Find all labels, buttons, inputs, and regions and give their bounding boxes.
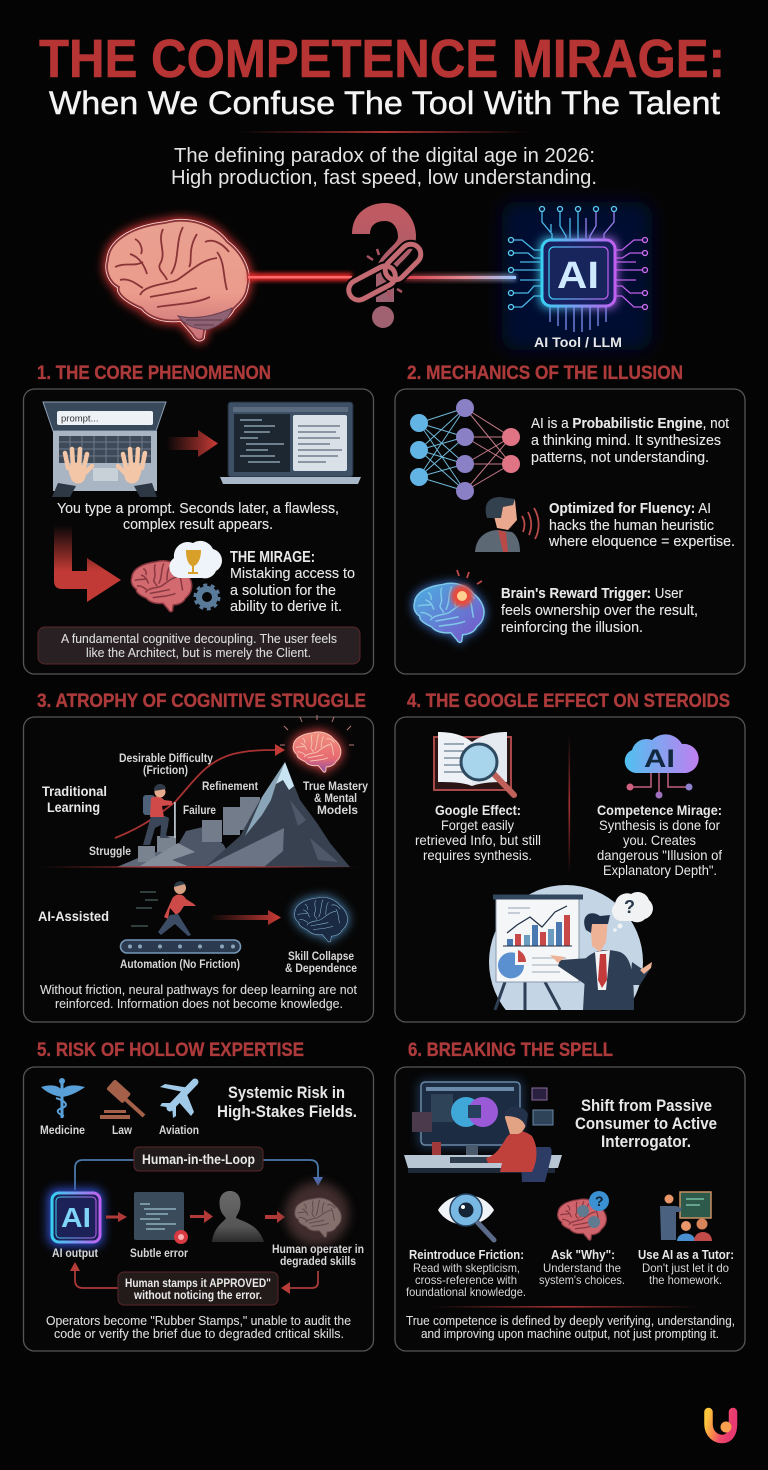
heading 3: 3. ATROPHY OF COGNITIVE STRUGGLE — [37, 691, 366, 712]
text: optimized for fluency: where eloquence = expertise. — [548, 533, 735, 550]
label: traditional learning: Learning — [47, 799, 100, 815]
hero: brain, broken link, AI chip — [107, 202, 652, 350]
callout: A fundamental cognitive decoupling. The user feels — [61, 631, 337, 646]
icon: brain with question bubble: ? — [595, 1193, 604, 1209]
labels: fields — [40, 1123, 199, 1137]
text: use AI as a tutor: Use AI as a Tutor: — [638, 1247, 734, 1262]
callout: human-in-the-loop — [134, 1147, 263, 1171]
text: the mirage: a solution for the — [230, 582, 336, 599]
heading 2: 2. MECHANICS OF THE ILLUSION — [407, 363, 683, 384]
panel: core phenomenon — [24, 389, 374, 674]
labels: climb stages: Struggle — [89, 844, 131, 858]
text: reintroduce friction: foundational knowledge. — [406, 1285, 526, 1299]
arrow — [190, 1210, 213, 1223]
arrow: L-shaped down to mirage — [54, 525, 121, 602]
text: conclusion: reinforced. Information does not become knowledge. — [55, 996, 343, 1011]
callout: like the Architect, but is merely the Client. — [86, 645, 311, 660]
text: prompt description — [57, 500, 339, 533]
text: google effect: Forget easily — [441, 817, 514, 833]
text: reintroduce friction — [406, 1247, 526, 1299]
text: reintroduce friction: cross-reference with — [415, 1273, 517, 1287]
wire: right segment — [404, 274, 516, 281]
heading 6: 6. BREAKING THE SPELL — [408, 1040, 613, 1061]
icon: brain with question bubble — [558, 1191, 609, 1240]
text: google effect — [415, 802, 541, 863]
text: conclusion: code or verify the brief due to degraded critical skills. — [54, 1326, 344, 1341]
labels: climb stages: & Mental — [314, 791, 357, 805]
labels: fields: Aviation — [159, 1123, 199, 1137]
icon: AI cloud: AI — [644, 745, 675, 773]
panel: hollow expertise — [24, 1067, 374, 1351]
labels: climb stages — [89, 751, 368, 858]
icon: laptop with prompt and hands — [43, 402, 166, 497]
icon: medicine caduceus — [41, 1078, 85, 1118]
text: optimized for fluency: Optimized for Fluency: AI — [549, 500, 711, 517]
callout: approved — [118, 1272, 278, 1305]
labels: climb stages: Models — [317, 803, 358, 817]
label: AI Tool / LLM: AI Tool / LLM — [534, 334, 622, 350]
icon: brain with trophy cloud and gear — [131, 541, 222, 612]
arrow — [166, 430, 218, 457]
text: competence mirage: Explanatory Depth". — [603, 862, 717, 878]
text: google effect: retrieved Info, but still — [415, 832, 541, 848]
labels: loop nodes: Human operater in — [272, 1242, 364, 1256]
chart: ground line — [40, 866, 360, 868]
arrow: learning curve — [115, 744, 285, 838]
intro text: High production, fast speed, low understanding. — [171, 167, 597, 189]
text: reward trigger: Brain's Reward Trigger: User — [501, 585, 683, 602]
labels: loop nodes: AI output — [52, 1246, 98, 1260]
arrow: human-in-the-loop path — [75, 1160, 323, 1190]
labels: climb stages: Desirable Difficulty — [119, 751, 213, 765]
text: the mirage: Mistaking access to — [230, 565, 355, 582]
text: the mirage — [230, 549, 355, 615]
text: probabilistic engine: a thinking mind. It synthesizes — [531, 432, 721, 449]
intro text: The defining paradox of the digital age in 2026: — [174, 145, 595, 167]
text: ask why: system's choices. — [539, 1273, 625, 1287]
panel: google effect — [395, 717, 745, 1039]
text: competence mirage: Competence Mirage: — [597, 802, 722, 818]
icon: AI output box — [48, 1189, 103, 1246]
icon: laptop with result — [220, 402, 361, 484]
icon: law gavel — [100, 1079, 144, 1119]
icon: glowing mastery brain — [280, 715, 354, 773]
icon: runner on conveyor — [120, 881, 240, 953]
text: optimized for fluency: hacks the human heuristic — [549, 517, 714, 534]
text: probabilistic engine — [531, 415, 730, 466]
text: conclusion — [40, 982, 357, 1011]
text: ask why: Ask "Why": — [551, 1247, 615, 1262]
text: competence mirage: Synthesis is done for — [599, 817, 720, 833]
panel: atrophy — [24, 715, 374, 1022]
icon: faded human silhouette — [212, 1191, 264, 1242]
labels: climb stages: Refinement — [202, 779, 258, 793]
labels: fields: Medicine — [40, 1123, 85, 1137]
text: conclusion: Without friction, neural pathways for deep learning are not — [40, 982, 357, 997]
icon: tutor and students — [660, 1192, 712, 1241]
panel: mechanics — [395, 389, 745, 674]
text: conclusion: Operators become "Rubber Stamps," unable to audit the — [46, 1313, 351, 1328]
text: systemic risk: Systemic Risk in — [228, 1083, 345, 1102]
text: shift statement: Interrogator. — [601, 1132, 691, 1151]
labels: loop nodes: Subtle error — [130, 1246, 188, 1260]
arrow — [265, 1211, 285, 1223]
text: competence mirage — [597, 802, 722, 878]
icon: mountain with steps — [117, 762, 350, 867]
intro text — [171, 145, 597, 189]
icon: code window with error — [134, 1192, 188, 1244]
labels: automation and collapse: Skill Collapse — [288, 949, 354, 963]
text: prompt description: You type a prompt. Seconds later, a flawless, — [57, 500, 339, 517]
arrow — [106, 1212, 127, 1222]
labels: automation and collapse — [120, 949, 357, 975]
icon: thought bubble with question: ? — [624, 897, 635, 917]
text: use AI as a tutor — [638, 1247, 734, 1287]
labels: climb stages: True Mastery — [303, 779, 368, 793]
text: the mirage: ability to derive it. — [230, 598, 342, 615]
heading 1: 1. THE CORE PHENOMENON — [37, 363, 271, 384]
text: google effect: requires synthesis. — [423, 847, 532, 863]
icon: AI output box: AI — [61, 1202, 91, 1233]
text: competence mirage: you. Creates — [623, 832, 696, 848]
text: conclusion: True competence is defined by deeply verifying, understanding, — [406, 1313, 735, 1328]
icon: speaking man — [475, 497, 539, 552]
heading 5: 5. RISK OF HOLLOW EXPERTISE — [37, 1040, 304, 1061]
callout: approved: Human stamps it APPROVED" — [125, 1276, 271, 1290]
arrow: return path — [70, 1262, 318, 1294]
callout: human-in-the-loop: Human-in-the-Loop — [142, 1152, 255, 1167]
icon: AI cloud — [625, 734, 699, 798]
text: optimized for fluency — [548, 500, 735, 550]
text: systemic risk: High-Stakes Fields. — [217, 1102, 357, 1121]
label: traditional learning: Traditional — [42, 783, 107, 799]
labels: climb stages: (Friction) — [143, 763, 188, 777]
icon: collapsed brain — [293, 896, 349, 943]
text: shift statement: Consumer to Active — [575, 1114, 717, 1133]
label: traditional learning — [42, 783, 107, 815]
icon: neural network — [410, 399, 520, 500]
title: When We Confuse The Tool With The Talent — [49, 85, 720, 121]
text: reintroduce friction: Read with skepticism, — [413, 1261, 520, 1275]
title — [39, 29, 725, 121]
text: systemic risk — [217, 1083, 357, 1121]
text: the mirage: THE MIRAGE: — [230, 549, 315, 566]
text: conclusion — [406, 1313, 735, 1341]
text: ask why — [539, 1247, 625, 1287]
text: reward trigger: feels ownership over the result, — [501, 602, 698, 619]
text: google effect: Google Effect: — [435, 802, 521, 818]
icon: aviation plane — [160, 1082, 195, 1118]
callout — [38, 627, 360, 664]
text: shift statement: Shift from Passive — [581, 1096, 712, 1115]
labels: automation and collapse: & Dependence — [285, 961, 357, 975]
text: reward trigger — [501, 585, 698, 636]
icon: broken chain link — [345, 240, 425, 304]
text: use AI as a tutor: Don't just let it do — [642, 1261, 729, 1275]
text: ask why: Understand the — [543, 1261, 621, 1275]
callout: approved: without noticing the error. — [133, 1288, 262, 1302]
icon: chip glow backdrop — [502, 202, 652, 350]
text: conclusion — [46, 1313, 351, 1341]
wire: left segment — [248, 273, 352, 281]
icon: person at monitor — [404, 1080, 562, 1182]
labels: fields: Law — [112, 1123, 133, 1137]
icon: presenter at chart board — [489, 885, 652, 1010]
icon: book and magnifier — [434, 732, 514, 795]
text: probabilistic engine: patterns, not understanding. — [531, 449, 709, 466]
icon: AI chip: AI — [557, 255, 599, 297]
labels: loop nodes — [52, 1242, 364, 1268]
label: AI-assisted: AI-Assisted — [38, 908, 109, 924]
labels: automation and collapse: Automation (No Friction) — [120, 957, 240, 971]
divider — [568, 735, 570, 875]
icon: logo — [708, 1412, 733, 1439]
text: shift statement — [575, 1096, 717, 1151]
icon: degraded brain — [285, 1182, 349, 1246]
labels: loop nodes: degraded skills — [280, 1254, 356, 1268]
text: reintroduce friction: Reintroduce Friction: — [409, 1247, 524, 1262]
icon: AI chip — [508, 206, 648, 332]
icon: thought bubble with question — [612, 892, 653, 932]
text: competence mirage: dangerous "Illusion of — [597, 847, 722, 863]
icon: question mark — [361, 212, 407, 328]
icon: human brain — [107, 221, 248, 340]
text: use AI as a tutor: the homework. — [649, 1273, 722, 1287]
text: conclusion: and improving upon machine output, not just prompting it. — [421, 1326, 719, 1341]
text: probabilistic engine: AI is a Probabilistic Engine, not — [531, 415, 730, 432]
text: reward trigger: reinforcing the illusion. — [501, 619, 643, 636]
heading 4: 4. THE GOOGLE EFFECT ON STEROIDS — [407, 691, 730, 712]
icon: climber — [143, 784, 176, 845]
arrow — [210, 910, 281, 925]
text: prompt description: complex result appears. — [123, 516, 273, 533]
icon: laptop with prompt and hands: prompt... — [61, 414, 98, 424]
labels: climb stages: Failure — [183, 803, 216, 817]
panel: breaking the spell — [395, 1067, 745, 1351]
icon: eye with magnifier — [438, 1194, 494, 1240]
icon: glowing brain with reward spot — [413, 570, 485, 643]
